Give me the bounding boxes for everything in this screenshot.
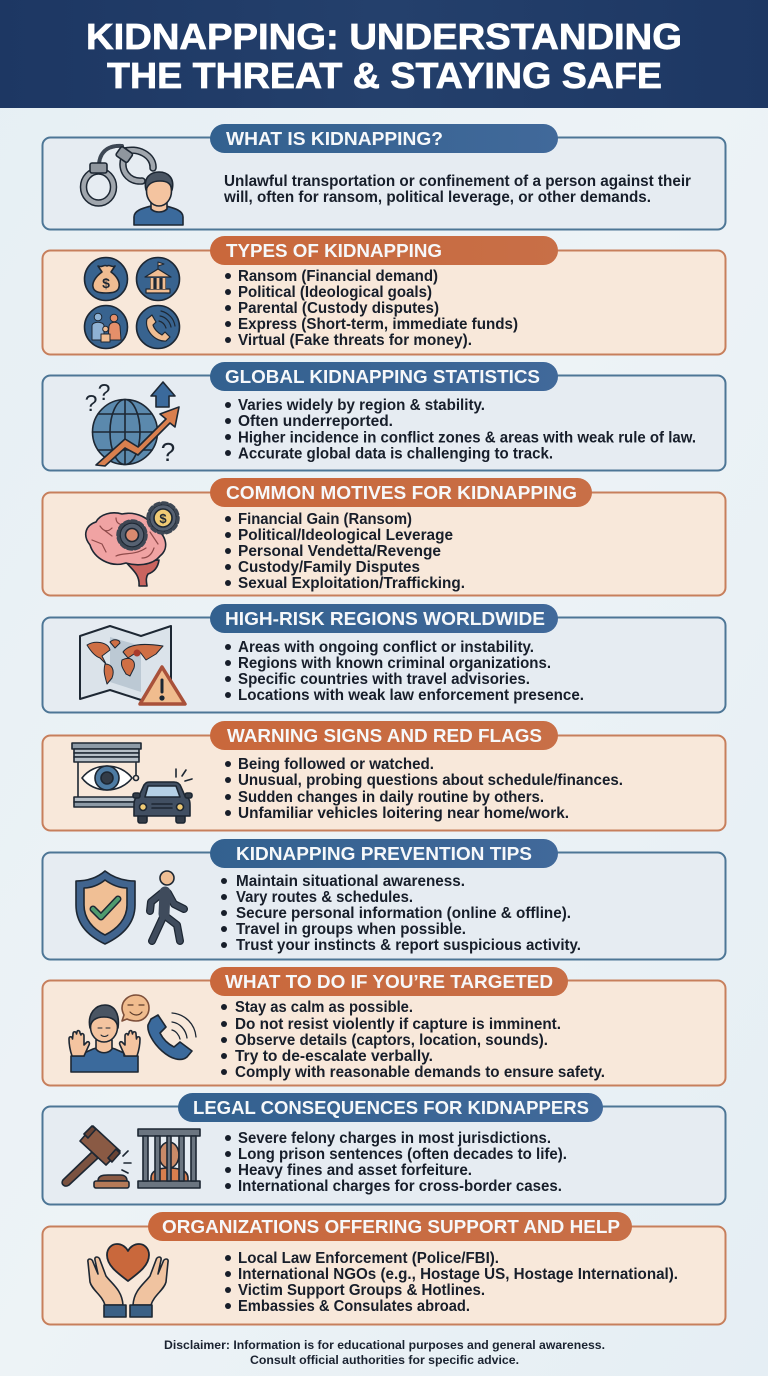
title: KIDNAPPING: UNDERSTANDING: [86, 16, 682, 57]
bullet list: Severe felony charges in most jurisdictions.: [238, 1130, 551, 1147]
bullet list: [225, 268, 518, 349]
bullet list: [225, 511, 465, 592]
panel: what is kidnapping: [42, 124, 726, 230]
panel: legal consequences: [42, 1093, 726, 1204]
bullet list: [221, 873, 581, 954]
icon: eye behind blinds and car: [72, 743, 192, 823]
bullet list: Financial Gain (Ransom): [238, 511, 412, 528]
panel: global statistics: [42, 362, 726, 470]
bullet list: Observe details (captors, location, sounds).: [235, 1032, 548, 1049]
bullet list: [221, 999, 605, 1081]
bullet list: [225, 639, 584, 704]
icon: brain with gears: $: [159, 511, 167, 526]
bullet list: Unfamiliar vehicles loitering near home/work.: [238, 805, 569, 822]
heading: what to do if targeted: [210, 967, 568, 996]
heading: legal consequences: LEGAL CONSEQUENCES FOR KIDNAPPERS: [193, 1098, 589, 1118]
bullet list: Stay as calm as possible.: [235, 999, 413, 1016]
icon: globe with rising arrow: ?: [98, 379, 110, 405]
bullet list: Political (Ideological goals): [238, 284, 432, 301]
bullet list: Higher incidence in conflict zones & areas with weak rule of law.: [238, 430, 696, 446]
panel: types of kidnapping: [42, 236, 726, 354]
icon: globe with rising arrow: ?: [85, 390, 97, 416]
bullet list: Specific countries with travel advisories.: [238, 671, 530, 688]
bullet list: Do not resist violently if capture is imminent.: [235, 1016, 561, 1033]
heading: what to do if targeted: WHAT TO DO IF YOU’RE TARGETED: [225, 972, 553, 992]
disclaimer: Disclaimer: Information is for educational purposes and general awareness.: [164, 1338, 605, 1352]
icon: political building: [136, 258, 180, 300]
bullet list: [225, 397, 696, 462]
title: [86, 16, 682, 96]
icon: person with raised hands: [69, 1005, 140, 1072]
panel: what to do if targeted: [42, 967, 726, 1086]
icon: handcuffs and person: [84, 146, 183, 225]
panel: warning signs: [42, 721, 726, 830]
disclaimer: Consult official authorities for specific advice.: [250, 1353, 519, 1367]
heading: warning signs: WARNING SIGNS AND RED FLAGS: [227, 726, 542, 746]
bullet list: Virtual (Fake threats for money).: [238, 332, 472, 349]
heading: types of kidnapping: TYPES OF KIDNAPPING: [226, 241, 442, 261]
icon: brain with gears: [86, 503, 178, 586]
heading: high-risk regions: HIGH-RISK REGIONS WORLDWIDE: [225, 609, 545, 629]
bullet list: Political/Ideological Leverage: [238, 527, 453, 544]
icon: phone call: [136, 306, 180, 348]
bullet list: Custody/Family Disputes: [238, 559, 420, 576]
panel: common motives: [42, 478, 726, 596]
heading: organizations offering support: ORGANIZATIONS OFFERING SUPPORT AND HELP: [162, 1217, 620, 1237]
icon: telephone: [148, 1013, 196, 1059]
bullet list: Victim Support Groups & Hotlines.: [238, 1282, 485, 1299]
heading: types of kidnapping: [210, 236, 558, 265]
heading: organizations offering support: [148, 1212, 632, 1241]
bullet list: Parental (Custody disputes): [238, 300, 439, 317]
bullet list: Embassies & Consulates abroad.: [238, 1298, 470, 1315]
icon: world map with warning: [80, 626, 185, 704]
icon: hands holding heart: [88, 1244, 168, 1317]
bullet list: Areas with ongoing conflict or instability.: [238, 639, 534, 656]
icon: globe with rising arrow: ?: [161, 437, 175, 467]
header banner: [0, 0, 768, 108]
bullet list: Accurate global data is challenging to track.: [238, 446, 553, 462]
bullet list: Sudden changes in daily routine by others.: [238, 789, 544, 806]
icon: shield with check: [76, 871, 135, 944]
heading: high-risk regions: [210, 604, 558, 633]
bullet list: Sexual Exploitation/Trafficking.: [238, 575, 465, 592]
bullet list: [225, 1130, 567, 1195]
panel: high-risk regions: [42, 604, 726, 712]
icon: globe with rising arrow: [85, 379, 179, 467]
heading: prevention tips: [210, 839, 558, 868]
bullet list: Long prison sentences (often decades to life).: [238, 1146, 567, 1163]
bullet list: Often underreported.: [238, 413, 393, 430]
bullet list: Varies widely by region & stability.: [238, 397, 485, 414]
disclaimer: [164, 1338, 605, 1367]
icon: walking person: [150, 871, 184, 941]
bullet list: Ransom (Financial demand): [238, 268, 438, 285]
icon: prisoner behind bars: [138, 1129, 200, 1188]
bullet list: Secure personal information (online & offline).: [236, 905, 571, 922]
bullet list: Travel in groups when possible.: [236, 921, 466, 938]
heading: global statistics: [210, 362, 558, 391]
heading: global statistics: GLOBAL KIDNAPPING STATISTICS: [225, 367, 540, 387]
title: THE THREAT & STAYING SAFE: [107, 55, 662, 96]
bullet list: Unusual, probing questions about schedule/finances.: [238, 772, 623, 789]
text block: [223, 173, 691, 206]
bullet list: Local Law Enforcement (Police/FBI).: [238, 1250, 499, 1267]
heading: prevention tips: KIDNAPPING PREVENTION TIPS: [236, 844, 532, 864]
icon: speech bubble: [122, 995, 149, 1021]
bullet list: Express (Short-term, immediate funds): [238, 316, 518, 333]
bullet list: Being followed or watched.: [238, 756, 434, 773]
bullet list: [225, 1250, 678, 1315]
bullet list: Comply with reasonable demands to ensure safety.: [235, 1064, 605, 1081]
text block: Unlawful transportation or confinement of a person against their: [224, 173, 691, 190]
bullet list: Heavy fines and asset forfeiture.: [238, 1162, 472, 1179]
icon: ransom money bag: [84, 258, 128, 300]
bullet list: Trust your instincts & report suspicious activity.: [236, 937, 581, 954]
bullet list: Vary routes & schedules.: [236, 889, 413, 906]
heading: warning signs: [210, 721, 558, 750]
panel: prevention tips: [42, 839, 726, 960]
heading: what is kidnapping: WHAT IS KIDNAPPING?: [226, 129, 443, 149]
heading: common motives: COMMON MOTIVES FOR KIDNAPPING: [226, 483, 577, 503]
bullet list: Locations with weak law enforcement presence.: [238, 687, 584, 704]
icon: family: [84, 306, 128, 348]
heading: legal consequences: [178, 1093, 603, 1122]
bullet list: Personal Vendetta/Revenge: [238, 543, 441, 560]
bullet list: International charges for cross-border cases.: [238, 1178, 562, 1195]
heading: what is kidnapping: [210, 124, 558, 153]
panel: organizations offering support: [42, 1212, 726, 1324]
bullet list: Maintain situational awareness.: [236, 873, 465, 890]
bullet list: Try to de-escalate verbally.: [235, 1048, 433, 1065]
bullet list: International NGOs (e.g., Hostage US, Hostage International).: [238, 1266, 678, 1283]
heading: common motives: [210, 478, 592, 507]
icon: gavel: [62, 1126, 131, 1188]
bullet list: Regions with known criminal organizations.: [238, 655, 551, 672]
text block: will, often for ransom, political leverage, or other demands.: [223, 189, 651, 206]
bullet list: [225, 756, 623, 822]
icon: ransom money bag: $: [102, 275, 110, 291]
